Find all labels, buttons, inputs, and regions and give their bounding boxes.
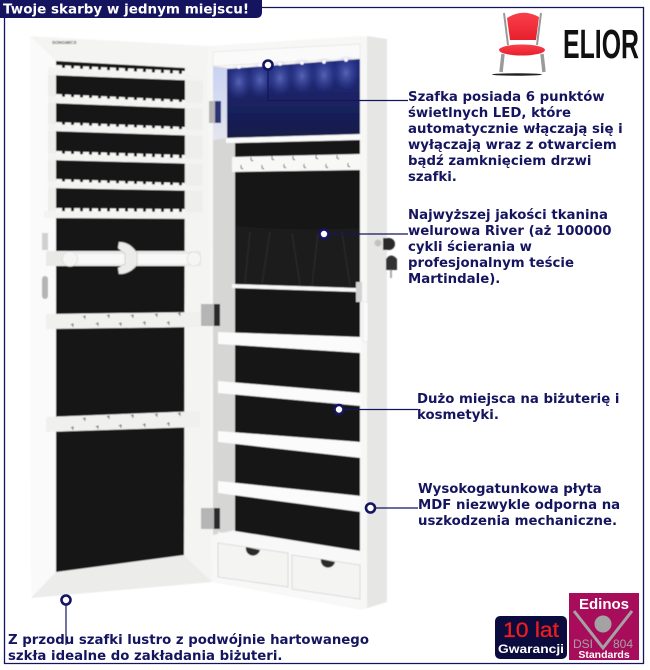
cabinet side panel	[367, 36, 387, 608]
callout: mirror: szkła idealne do zakładania biżuteri.	[8, 649, 282, 664]
black interior	[235, 140, 360, 551]
logo: red chair	[492, 13, 545, 76]
thin rail under pocket	[232, 284, 357, 292]
white divider shelf	[226, 134, 361, 143]
callout: MDF board	[366, 482, 620, 529]
callout: fabric: cykli ścierania w	[408, 239, 532, 255]
badge: 10 year warranty: 10 lat	[503, 619, 559, 642]
badge: Edinos standards: Edinos	[579, 596, 629, 613]
door panel	[30, 36, 212, 598]
lock and key	[374, 238, 397, 278]
callout: MDF board: uszkodzenia mechaniczne.	[418, 514, 617, 529]
callout: fabric: Martindale).	[408, 272, 500, 287]
callout: LED: Szafka posiada 6 punktów	[408, 89, 605, 105]
ring holder rod with arrow	[46, 242, 201, 274]
badge: 10 year warranty	[495, 616, 567, 659]
badge: Edinos standards: Standards	[578, 649, 630, 661]
door jewellery bands	[44, 67, 203, 219]
callout: mirror: Z przodu szafki lustro z podwójnie hartowanego	[8, 632, 369, 648]
door side rails	[48, 68, 203, 216]
velvet fabric pocket	[235, 226, 360, 287]
callout: LED: szafki.	[408, 170, 457, 185]
drawer left	[218, 543, 288, 587]
badge: Edinos standards	[569, 593, 639, 661]
top lamp panel	[213, 44, 360, 66]
callout: MDF board: MDF niezwykle odporna na	[418, 498, 620, 513]
callout: mirror	[8, 596, 369, 664]
callout: fabric: profesjonalnym teście	[408, 255, 574, 271]
brand mark on door: SONGMICS	[52, 40, 77, 45]
shelves	[218, 332, 361, 512]
drawer unit	[212, 532, 360, 609]
callout: fabric: Najwyższej jakości tkanina	[408, 207, 608, 223]
product: open jewellery cabinet	[30, 36, 397, 610]
hook strip lower	[46, 411, 200, 432]
callout: LED: bądź zamknięciem drzwi	[408, 153, 591, 169]
callout: LED	[264, 60, 623, 185]
hinge bottom	[201, 508, 220, 529]
cabinet body	[208, 36, 387, 610]
callout: storage space: kosmetyki.	[417, 408, 499, 423]
header banner: Twoje skarby w jednym miejscu!	[3, 2, 249, 18]
LED lit area	[226, 55, 360, 138]
clasp and handle	[356, 282, 362, 302]
callout: LED: wyłączają wraz z otwarciem	[408, 138, 617, 153]
small door fittings	[42, 233, 48, 250]
callout: LED: świetlnych LED, które	[408, 105, 571, 121]
drawer right	[292, 555, 360, 599]
callout: storage space	[334, 392, 619, 423]
badge: Edinos standards: DSI	[573, 637, 593, 651]
hinge middle	[201, 304, 220, 326]
callout: MDF board: Wysokogatunkowa płyta	[418, 482, 602, 497]
callout: LED: automatycznie włączają się i	[408, 122, 623, 137]
callout: storage space: Dużo miejsca na biżuterię i	[417, 392, 619, 407]
hook strip upper	[46, 312, 200, 329]
callout: fabric: welurowa River (aż 100000	[408, 224, 612, 239]
hinge top	[209, 101, 221, 123]
door black lining	[56, 61, 185, 572]
hook bar in cabinet	[232, 154, 360, 172]
badge: Edinos standards: 804	[613, 637, 633, 651]
cabinet inner left wall	[213, 66, 235, 535]
callout: fabric	[320, 207, 612, 287]
badge: 10 year warranty: Gwarancji	[498, 644, 564, 656]
